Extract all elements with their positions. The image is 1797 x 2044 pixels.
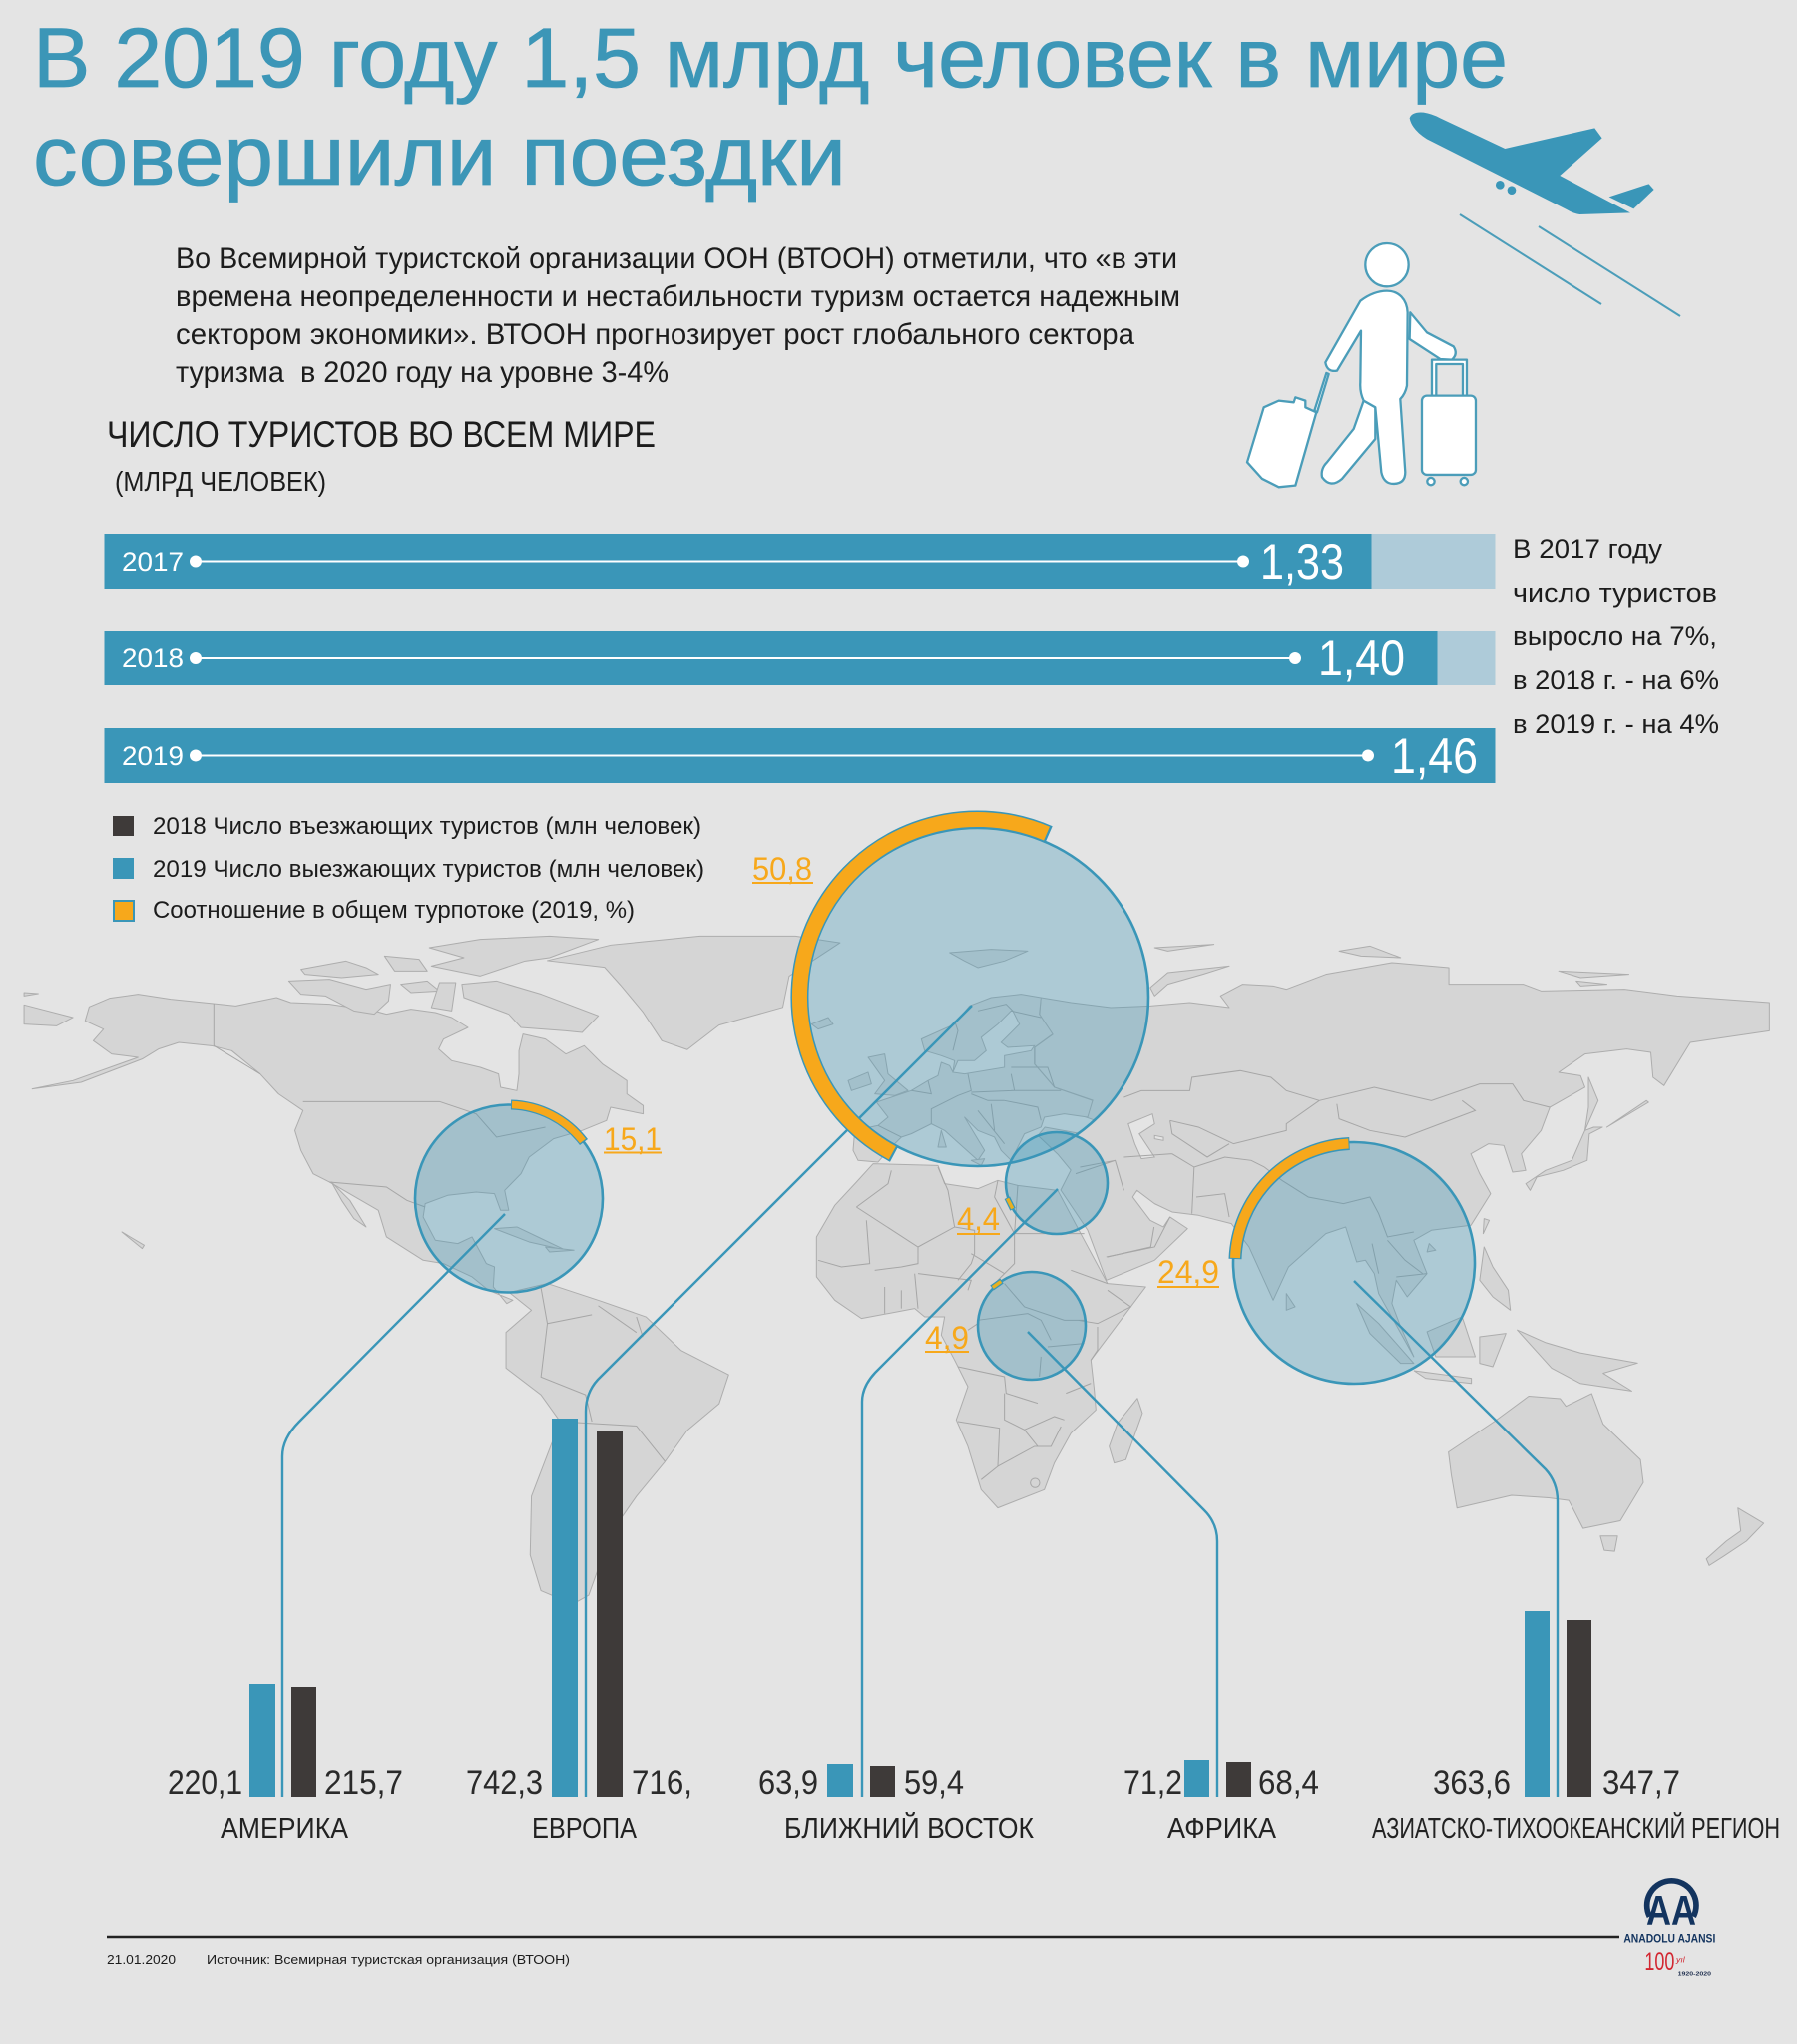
icon: traveller with suitcases (1247, 243, 1476, 487)
regional bars: Africa: 68,4 (1258, 1764, 1319, 1802)
bar 2019: 2019 (122, 741, 184, 771)
logo: Anadolu Ajansi: AA (1646, 1887, 1696, 1934)
growth note: число туристов (1513, 578, 1717, 608)
heading: number of tourists: ЧИСЛО ТУРИСТОВ ВО ВСЕМ МИРЕ (107, 414, 656, 455)
world map (24, 936, 1769, 1604)
regional bars: Europe: 716, (632, 1764, 692, 1802)
logo: Anadolu Ajansi (1623, 1881, 1715, 1978)
leader line: Africa (1028, 1332, 1217, 1797)
share arc: Europe (799, 819, 1049, 1154)
share value: 50,8: 50,8 (752, 851, 812, 887)
regional bars: America (168, 1684, 403, 1844)
regional bars: America: 220,1 (168, 1764, 242, 1802)
growth note: в 2018 г. - на 6% (1513, 665, 1719, 695)
growth note: в 2019 г. - на 4% (1513, 709, 1719, 739)
regional bars: America: 215,7 (324, 1764, 403, 1802)
bar 2018 (104, 630, 1495, 686)
regional bars: Africa (1123, 1760, 1319, 1844)
bar 2017: 1,33 (1260, 534, 1344, 590)
regional bars: America: АМЕРИКА (221, 1813, 349, 1844)
share value: 24,9: 24,9 (1157, 1254, 1219, 1290)
share arc: America (511, 1105, 584, 1142)
leader line: Middle East (862, 1189, 1058, 1797)
leader line: America (282, 1214, 505, 1797)
bar 2019 (104, 728, 1495, 784)
legend: 2019 Число выезжающих туристов (млн человек) (153, 856, 704, 883)
regional bars: Asia-Pacific: 347,7 (1602, 1764, 1680, 1802)
bubble: Europe (806, 828, 1148, 1166)
bar 2018: 1,40 (1318, 630, 1405, 686)
regional bars: Asia-Pacific: 363,6 (1433, 1764, 1511, 1802)
share value: 4,9: 4,9 (925, 1320, 969, 1356)
regional bars: Middle East: БЛИЖНИЙ ВОСТОК (784, 1811, 1034, 1844)
footer date: 21.01.2020 (107, 1952, 176, 1967)
bar 2017 (104, 534, 1495, 590)
intro text block (176, 242, 1180, 389)
footer source: Источник: Всемирная туристская организация (ВТООН) (207, 1952, 570, 1967)
icon: airplane (1410, 113, 1654, 214)
title (33, 11, 1508, 203)
bubble: America (415, 1105, 603, 1293)
regional bars: Europe (466, 1419, 692, 1844)
bar 2018: 2018 (122, 643, 184, 673)
legend (113, 813, 704, 924)
regional bars: Europe: 742,3 (466, 1764, 543, 1802)
bubble: Middle East (1006, 1132, 1108, 1234)
regional bars: Middle East (758, 1764, 1034, 1844)
leader line: Asia-Pacific (1354, 1281, 1558, 1797)
regional bars: Middle East: 59,4 (904, 1764, 964, 1802)
regional bars: Middle East: 63,9 (758, 1764, 818, 1802)
contrails (1460, 214, 1680, 316)
intro text block: времена неопределенности и нестабильности туризм остается надежным (176, 280, 1180, 313)
intro text block: Во Всемирной туристской организации ООН (ВТООН) отметили, что «в эти (176, 242, 1177, 275)
logo: Anadolu Ajansi: 1920-2020 (1678, 1972, 1711, 1978)
intro text block: сектором экономики». ВТООН прогнозирует рост глобального сектора (176, 318, 1134, 351)
share value: 15,1: 15,1 (604, 1121, 662, 1157)
leader line: Europe (586, 1006, 972, 1797)
regional bars: Africa: 71,2 (1123, 1764, 1182, 1802)
bar chart: tourists worldwide (104, 534, 1495, 784)
share arc: Africa (992, 1281, 1002, 1288)
bubble: Africa (978, 1272, 1086, 1380)
share arc: Middle East (1007, 1198, 1013, 1209)
logo: Anadolu Ajansi: yıl (1675, 1954, 1686, 1964)
title: В 2019 году 1,5 млрд человек в мире (33, 11, 1508, 105)
intro text block: туризма в 2020 году на уровне 3-4% (176, 356, 669, 389)
title: совершили поездки (33, 109, 846, 203)
logo: Anadolu Ajansi: ANADOLU AJANSI (1623, 1931, 1715, 1945)
footer rule (107, 1936, 1619, 1938)
heading: number of tourists (107, 414, 656, 497)
growth note: выросло на 7%, (1513, 621, 1717, 651)
bar 2019: 1,46 (1391, 728, 1478, 784)
bar 2017: 2017 (122, 547, 184, 577)
legend: 2018 Число въезжающих туристов (млн человек) (153, 813, 701, 840)
regional bars: Africa: АФРИКА (1167, 1813, 1277, 1844)
growth note (1513, 534, 1719, 739)
share arc: Asia-Pacific (1235, 1143, 1349, 1259)
legend: Соотношение в общем турпотоке (2019, %) (153, 897, 635, 924)
logo: Anadolu Ajansi: 100 (1644, 1948, 1674, 1976)
regional bars: Asia-Pacific (1372, 1611, 1780, 1844)
bubble: Asia-Pacific (1233, 1142, 1475, 1384)
heading: number of tourists: (МЛРД ЧЕЛОВЕК) (115, 466, 326, 497)
growth note: В 2017 году (1513, 534, 1663, 564)
regional bars: Europe: ЕВРОПА (532, 1813, 638, 1844)
share value: 4,4: 4,4 (957, 1201, 1000, 1237)
